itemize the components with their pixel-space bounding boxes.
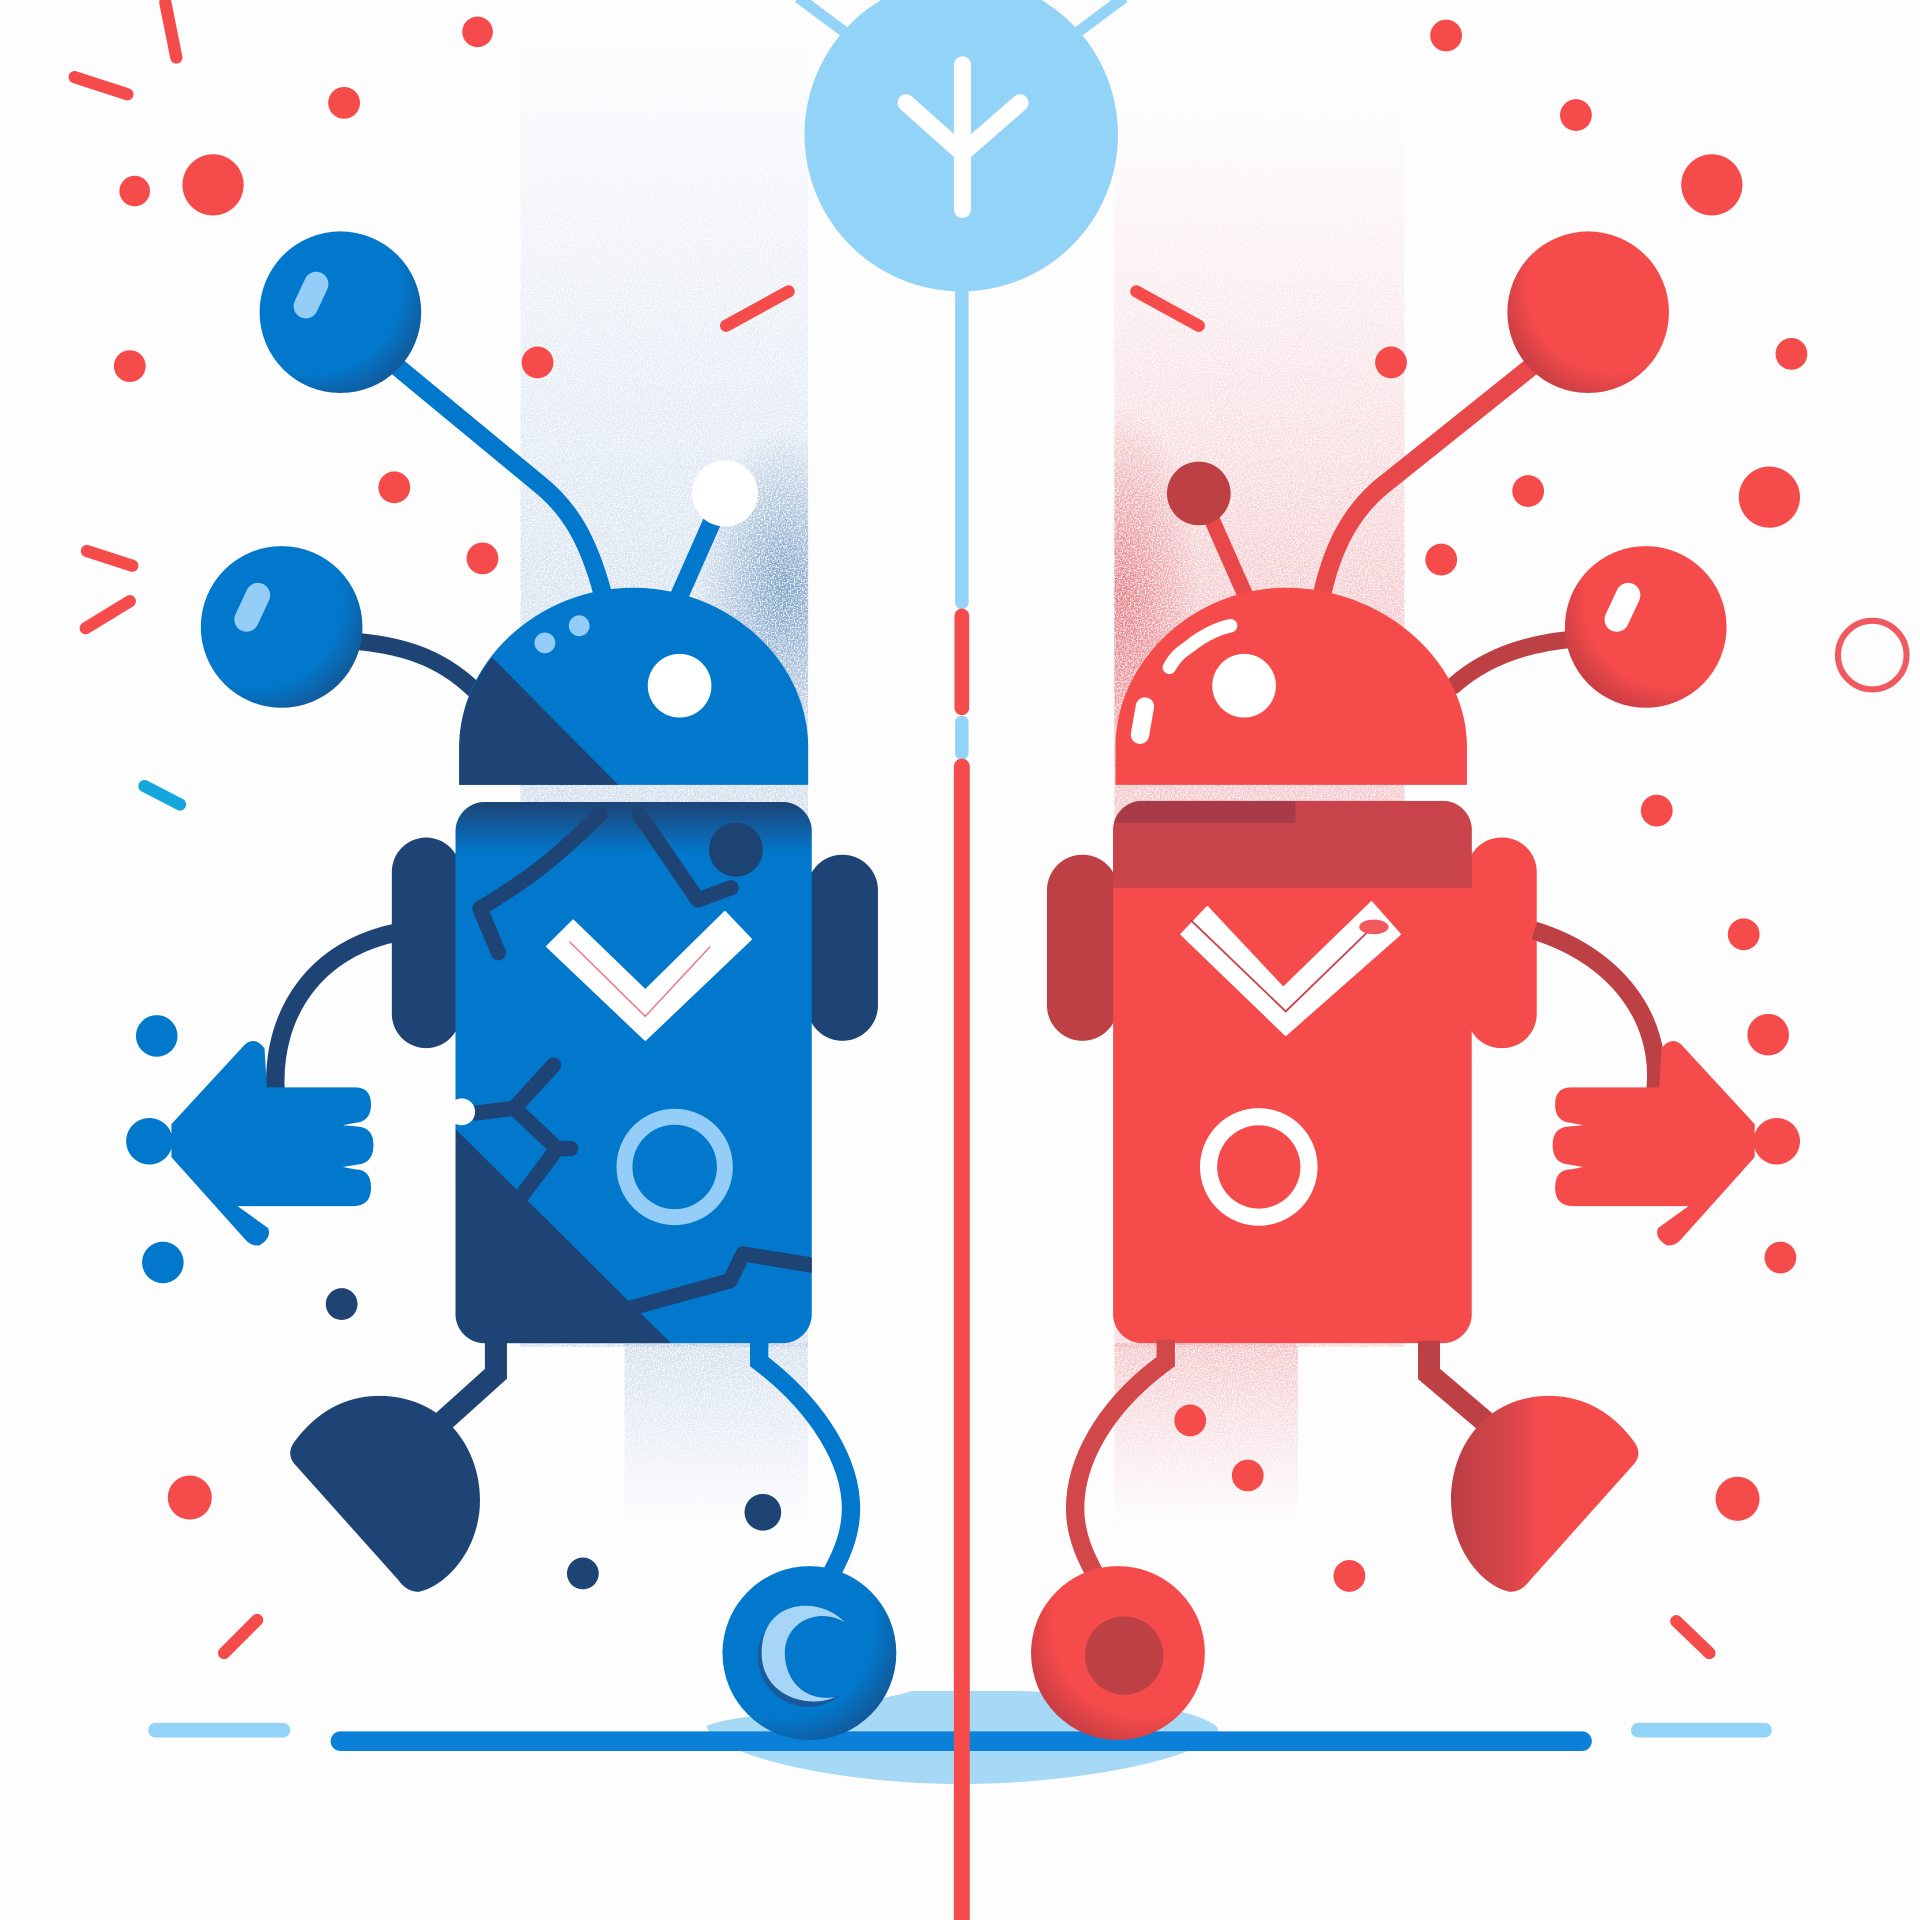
panel: red halftone backdrop bbox=[1114, 186, 1404, 1499]
red antenna ball top bbox=[1507, 231, 1669, 393]
blue robot foot bbox=[290, 1396, 480, 1592]
red robot bbox=[1031, 231, 1800, 1740]
red robot foot bbox=[1451, 1396, 1638, 1592]
blue robot leg right bbox=[759, 1340, 851, 1582]
red robot side pills bbox=[1047, 838, 1537, 1048]
red robot leg right bbox=[1429, 1341, 1494, 1429]
panel: blue halftone backdrop bbox=[520, 142, 808, 1494]
blue robot antennas bbox=[359, 367, 713, 696]
confetti: red dots bbox=[114, 17, 1807, 1592]
red robot head bbox=[1116, 588, 1467, 785]
icon: central circle with branching symbol bbox=[798, 0, 1124, 291]
red robot arm bbox=[1534, 931, 1656, 1090]
red robot leg left bbox=[1075, 1340, 1166, 1582]
blue robot ring bbox=[624, 1117, 725, 1217]
blue robot head bbox=[459, 588, 808, 785]
ground line bbox=[156, 1730, 1764, 1741]
red robot chevron badge bbox=[1182, 902, 1400, 1035]
red robot antennas bbox=[1212, 367, 1573, 686]
white antenna ball bbox=[692, 460, 758, 527]
central divider line bbox=[956, 289, 967, 1920]
blue antenna ball side bbox=[201, 546, 362, 708]
ground shadow bbox=[707, 1691, 1218, 1784]
confetti: dashes bbox=[75, 2, 1709, 1653]
red robot ring bbox=[1209, 1117, 1309, 1217]
red robot wheel bbox=[1031, 1566, 1205, 1740]
blue robot leg left bbox=[435, 1341, 496, 1429]
cracks bbox=[476, 814, 818, 1308]
red antenna ball side bbox=[1565, 546, 1727, 708]
red robot hand bbox=[1553, 1041, 1800, 1245]
confetti: open red ring bbox=[1838, 621, 1907, 689]
blue robot arm bbox=[275, 933, 394, 1090]
blue robot side pills bbox=[392, 838, 878, 1048]
blue antenna ball top bbox=[260, 231, 421, 393]
blue robot bbox=[126, 231, 896, 1740]
blue robot wheel bbox=[722, 1566, 896, 1740]
red robot body bbox=[1113, 801, 1472, 1343]
blue robot chevron badge bbox=[547, 912, 751, 1040]
confetti: blue and navy dots bbox=[136, 1015, 781, 1589]
blue robot hand bbox=[126, 1041, 373, 1245]
dark red antenna ball bbox=[1167, 462, 1231, 525]
blue robot body bbox=[448, 802, 818, 1343]
